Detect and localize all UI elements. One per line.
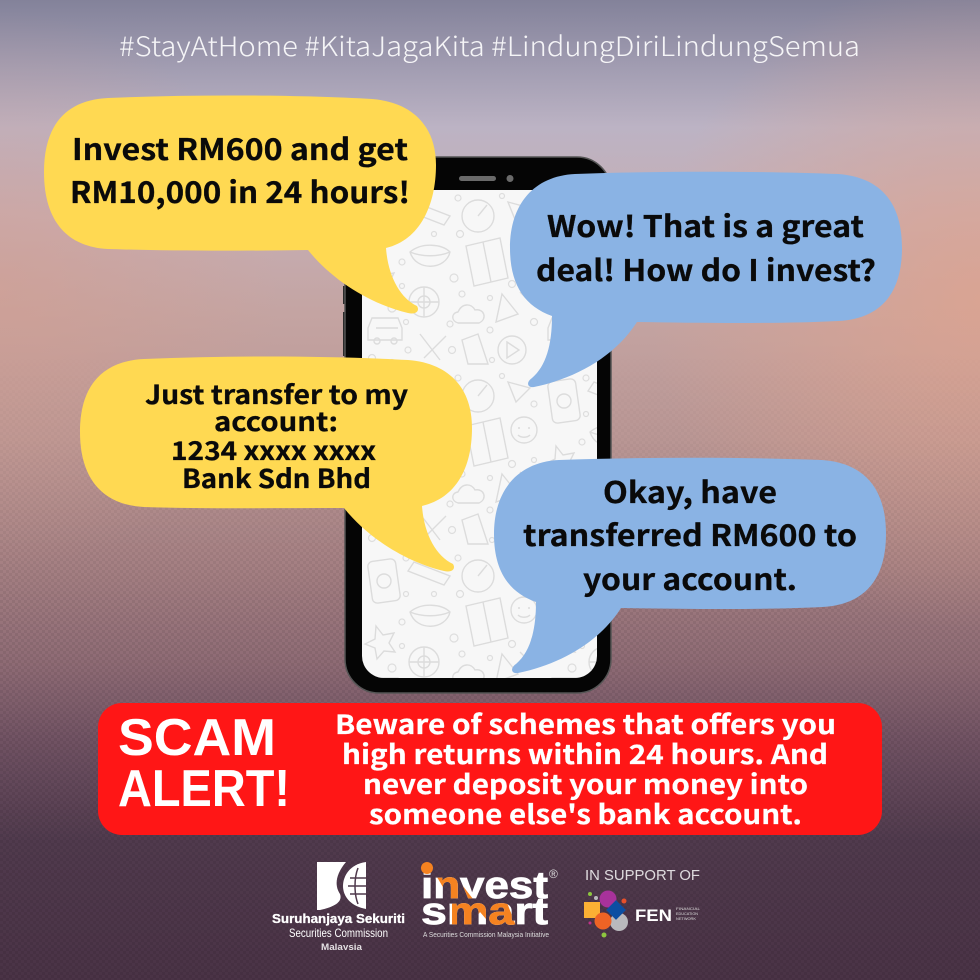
logo: InvestSmart: invest [421,865,548,907]
scam alert banner [98,703,882,835]
speech bubble: scammer offer [44,95,436,314]
scam alert title [118,709,290,818]
scam alert warning text: Beware of schemes that offers you [335,703,836,742]
phone body [345,157,611,693]
speech bubble: scammer offer: RM10,000 in 24 hours! [70,170,410,212]
speech bubble: victim reply: Wow! That is a great [547,204,864,246]
scam alert warning text [335,703,836,832]
logo: in support of FEN: EDUCATION [676,912,699,916]
phone side buttons [343,286,346,356]
speech bubble: bank account instruction [80,356,472,572]
speech bubble: bank account instruction: 1234 xxxx xxxx [171,431,376,468]
speech bubble: victim reply [510,172,902,387]
speech bubble: bank account instruction: account: [214,402,338,439]
logo: Securities Commission Malaysia: Suruhanjaya Sekuriti [272,911,405,926]
logo: in support of FEN: IN SUPPORT OF [585,868,700,884]
logo: Securities Commission Malaysia [272,862,405,953]
phone speaker and camera [459,175,514,182]
FEN icon [584,890,628,938]
phone screen with doodle wallpaper [362,190,597,680]
scam alert warning text: never deposit your money into [363,763,808,802]
logo: InvestSmart: smart [421,891,548,933]
scam alert title: SCAM [118,709,276,767]
logo: in support of FEN: FEN [635,906,672,925]
hashtag heading: #StayAtHome #KitaJagaKita #LindungDiriLindungSemua [119,25,860,64]
speech bubble: transfer confirmation: your account. [583,557,797,599]
logo: in support of FEN: NETWORK [676,917,697,921]
speech bubble: transfer confirmation: Okay, have [603,470,777,512]
logo: in support of FEN: FINANCIAL [676,907,700,911]
phone illustration [343,157,611,693]
logo: InvestSmart: invest [421,865,548,907]
speech bubble: scammer offer: Invest RM600 and get [72,127,408,169]
scam alert title: ALERT! [118,760,290,818]
emblem [317,862,366,910]
speech bubble: victim reply: deal! How do I invest? [536,248,876,290]
speech bubble: bank account instruction: Just transfer to my [145,375,408,412]
logo: Securities Commission Malaysia: Malaysia [321,942,363,953]
logo: in support of FEN [584,868,700,938]
speech bubble: transfer confirmation [494,458,886,673]
scam alert warning text: high returns within 24 hours. And [342,733,828,772]
scam alert warning text: someone else's bank account. [369,793,802,832]
speech bubble: bank account instruction: Bank Sdn Bhd [182,459,371,496]
logo: InvestSmart: smart [421,891,548,933]
logo: InvestSmart [421,862,558,939]
logo: InvestSmart: ® [549,867,558,881]
speech bubble: transfer confirmation: transferred RM600 to [523,513,857,555]
logo: Securities Commission Malaysia: Securities Commission [289,926,388,940]
logo: InvestSmart: A Securities Commission Malaysia Initiative [423,930,549,939]
